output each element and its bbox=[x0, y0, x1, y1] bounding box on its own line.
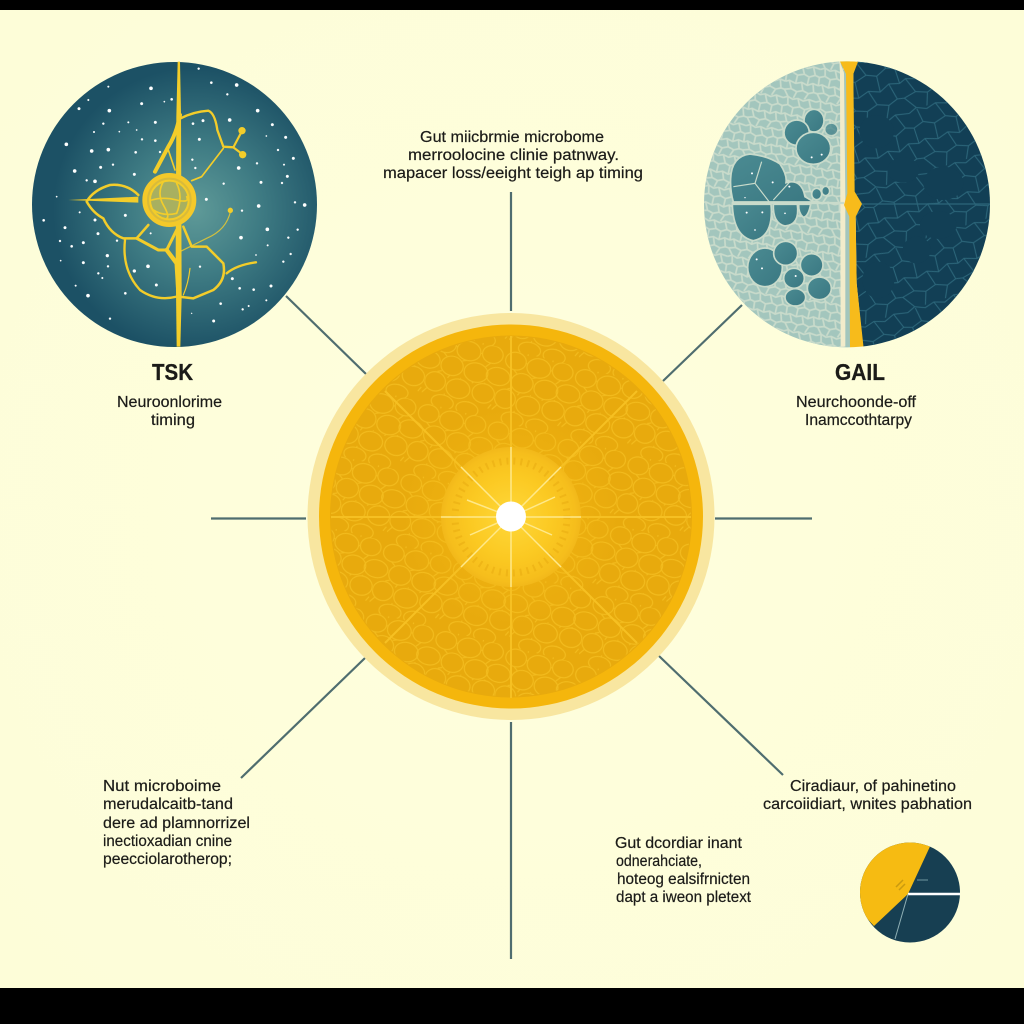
connector lines bbox=[211, 192, 812, 959]
text: top callout: merroolocine clinie patnway. bbox=[408, 147, 619, 164]
panel: tissue cross-section circle bbox=[700, 57, 997, 353]
text: GAIL description bbox=[796, 394, 917, 429]
text: GAIL description: Neurchoonde-off bbox=[796, 394, 917, 411]
text: bottom-centre callout: odnerahciate, bbox=[616, 853, 702, 870]
text: bottom-centre callout bbox=[615, 835, 752, 906]
top black bar bbox=[0, 0, 1024, 10]
text: top callout bbox=[383, 129, 643, 182]
text: bottom-right callout: Ciradiaur, of pahinetino bbox=[790, 778, 956, 795]
panel: central citrus disc bbox=[308, 313, 714, 720]
text: bottom-left callout: Nut microboime bbox=[103, 778, 221, 795]
text: TSK description bbox=[117, 394, 222, 429]
neuron cell body bbox=[145, 175, 194, 225]
bottom black bar bbox=[0, 988, 1024, 1024]
star specks bbox=[42, 68, 306, 322]
heading: TSK: TSK bbox=[152, 359, 193, 385]
heading: GAIL: GAIL bbox=[835, 359, 885, 385]
dark tissue half bbox=[853, 58, 997, 350]
text: bottom-left callout: dere ad plamnorrizel bbox=[103, 815, 250, 832]
segment spokes bbox=[331, 336, 691, 698]
text: bottom-centre callout: hoteog ealsifrnicten bbox=[617, 871, 750, 888]
text: bottom-centre callout: Gut dcordiar inant bbox=[615, 835, 743, 852]
text: bottom-left callout: merudalcaitb-tand bbox=[103, 796, 233, 813]
text: bottom-right callout: carcoiidiart, wnites pabhation bbox=[763, 796, 972, 813]
text: bottom-left callout: inectioxadian cnine bbox=[103, 833, 232, 850]
textured inner field bbox=[330, 336, 692, 698]
light tissue half bbox=[700, 57, 850, 353]
neuron network bbox=[68, 62, 256, 347]
cell specks bbox=[744, 154, 823, 277]
pie chart bbox=[860, 842, 960, 942]
text: top callout: mapacer loss/eeight teigh ap timing bbox=[383, 165, 643, 182]
text: top callout: Gut miicbrmie microbome bbox=[420, 129, 604, 146]
horizontal septum bbox=[732, 199, 844, 206]
cream membrane bbox=[839, 60, 845, 347]
central core bbox=[441, 447, 581, 587]
text: TSK description: timing bbox=[151, 412, 195, 429]
yellow membrane bbox=[839, 60, 864, 348]
text: bottom-right callout bbox=[763, 778, 972, 813]
text: GAIL description: Inamccothtarpy bbox=[805, 412, 912, 429]
panel: neuron circle bbox=[32, 62, 317, 347]
white centre dot bbox=[496, 502, 526, 532]
text: TSK description: Neuroonlorime bbox=[117, 394, 222, 411]
text: bottom-left callout: peecciolarotherop; bbox=[103, 851, 232, 868]
text: bottom-centre callout: dapt a iweon pletext bbox=[616, 889, 752, 906]
teal cell clusters bbox=[731, 109, 838, 306]
text: bottom-left callout bbox=[103, 778, 250, 868]
